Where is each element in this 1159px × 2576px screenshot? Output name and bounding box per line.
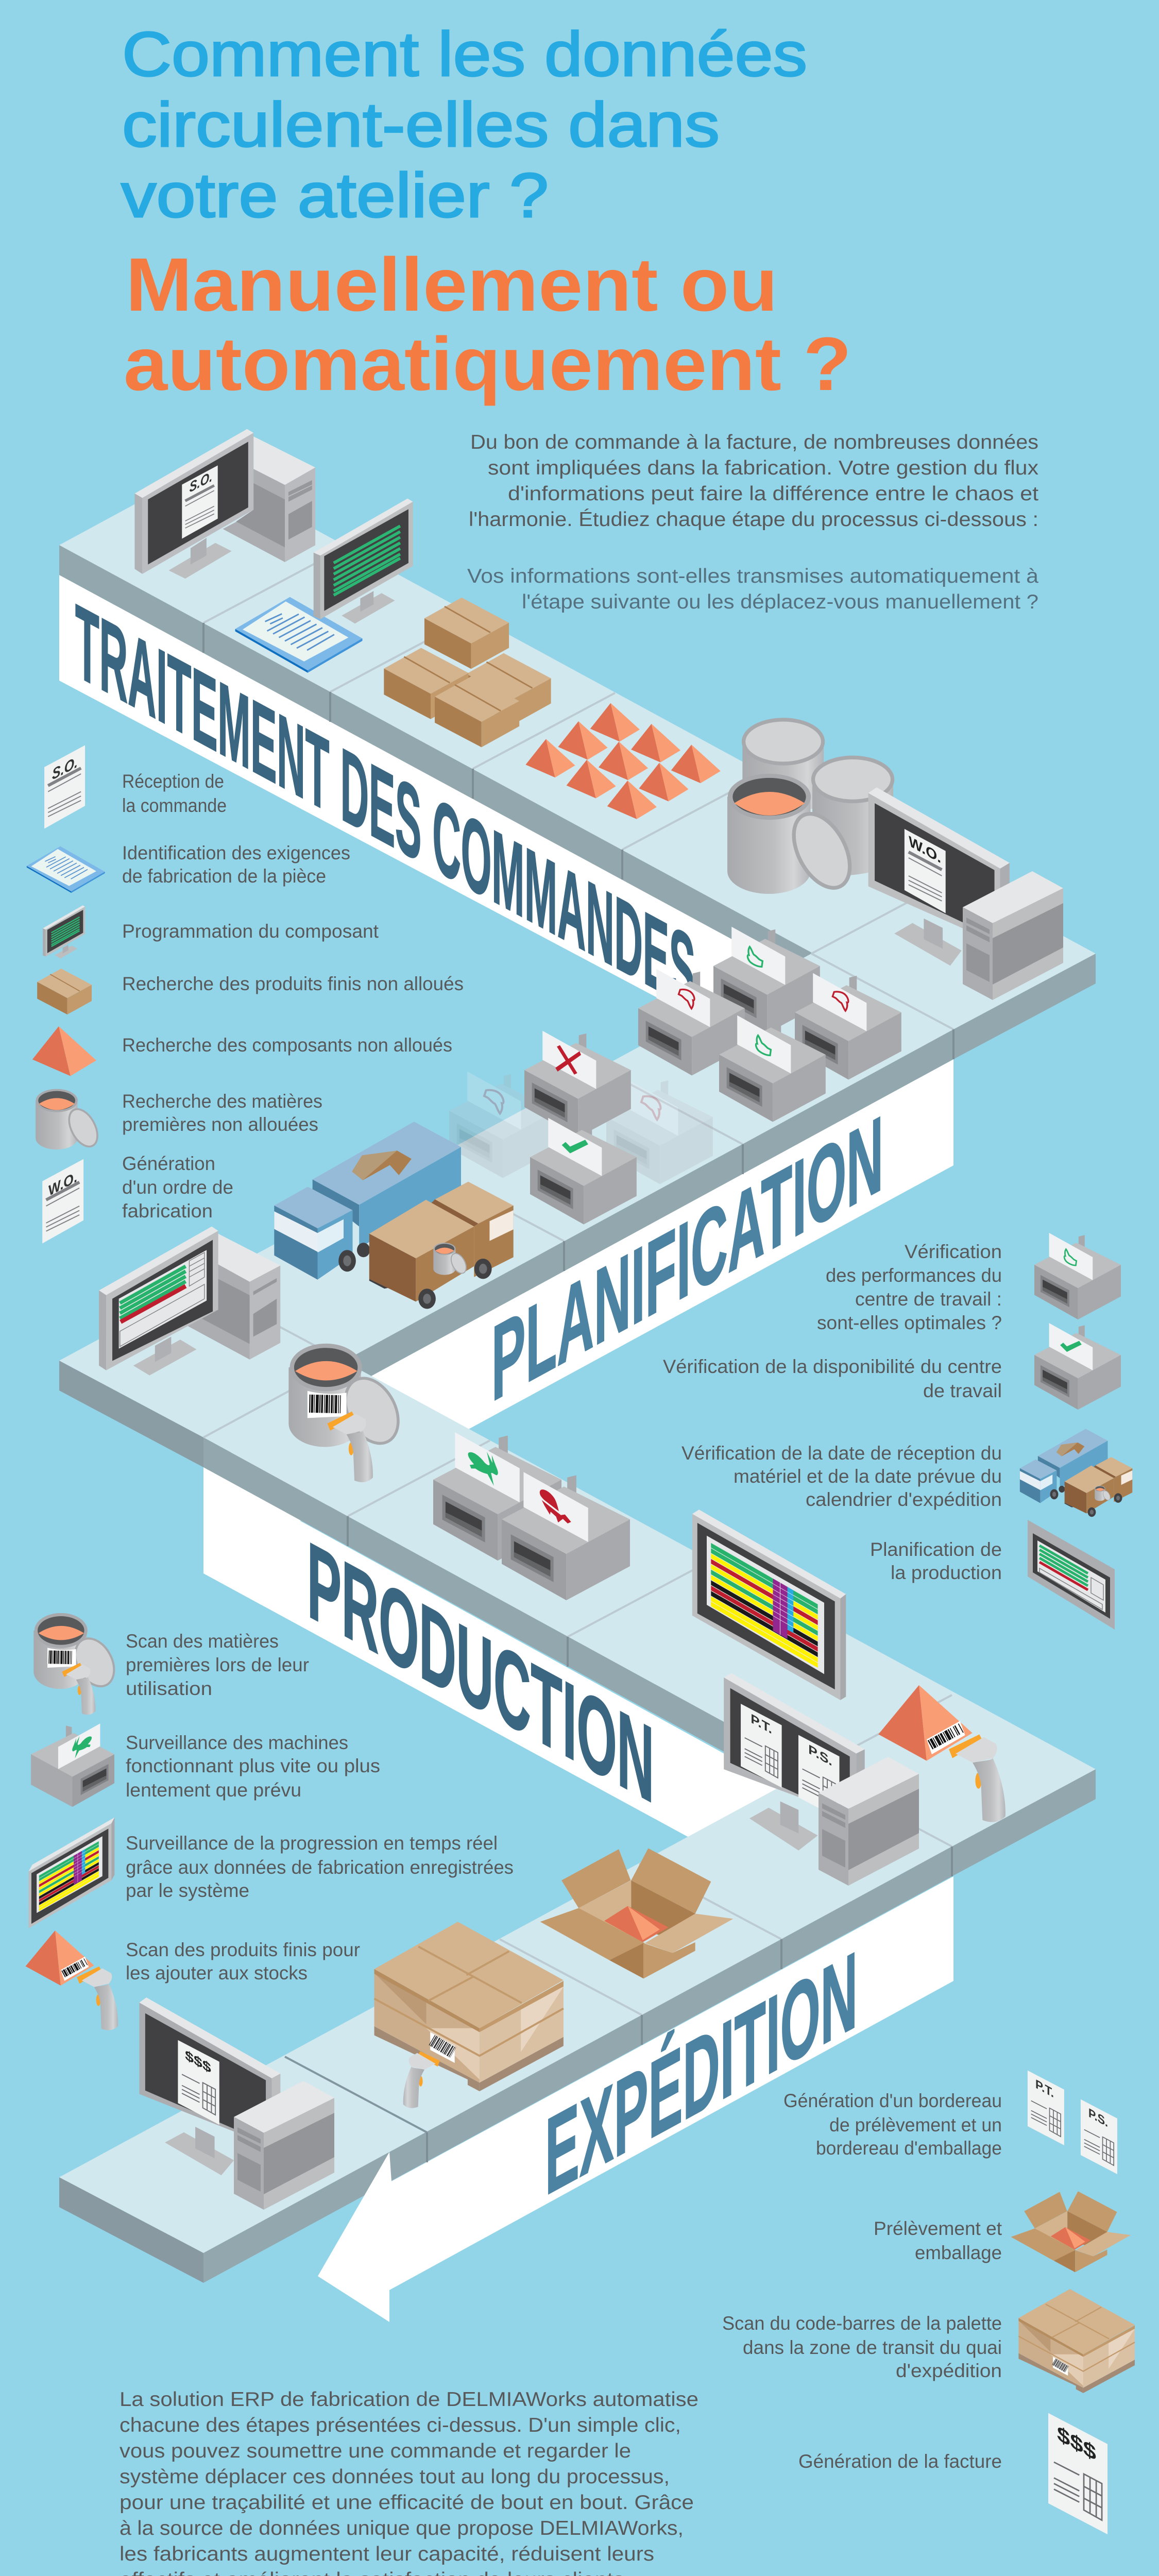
icon: pick and packing slips computer: P.T. — [751, 1711, 772, 1737]
icon: wrapped pallet — [374, 1922, 564, 2091]
band: planning front — [203, 1029, 953, 1467]
legend text: dates — [681, 1443, 1002, 1510]
legend icon: pick ticket — [1028, 2071, 1064, 2145]
legend icon: invoice: $$$ — [1057, 2421, 1096, 2466]
title: question: circulent-elles dans — [122, 90, 720, 160]
icon: rejected work center — [524, 1031, 631, 1138]
band: shipping left — [59, 2177, 203, 2283]
legend text: realtime progress: par le système — [126, 1880, 249, 1901]
legend icon: schedule — [28, 1770, 114, 1976]
icon: thumbs down work center right — [795, 973, 901, 1080]
icon: approved work center — [530, 1118, 637, 1225]
icon: pick and packing slips computer: P.S. — [808, 1741, 832, 1769]
arrow head — [318, 2152, 391, 2322]
legend text: realtime progress — [126, 1833, 514, 1901]
wall: expedition — [389, 1876, 953, 2290]
legend text: availability: de travail — [923, 1380, 1002, 1401]
legend text: dates: calendrier d'expédition — [806, 1489, 1002, 1510]
icon: raw material cans — [727, 720, 893, 897]
band: order processing front — [59, 545, 953, 1059]
platform top: production — [203, 1361, 1096, 1846]
legend text: part requirements: Identification des exigences — [122, 842, 350, 863]
legend text: slips: de prélèvement et un — [829, 2114, 1002, 2136]
text: introduction — [467, 431, 1039, 613]
platform top: order processing — [59, 468, 1096, 1029]
legend text: raw materials — [122, 1091, 322, 1135]
legend text: finished goods scan: les ajouter aux stocks — [126, 1962, 308, 1984]
icon: thumbs down work center left — [638, 969, 745, 1076]
title: question: votre atelier ? — [121, 160, 549, 230]
platform top: planning — [59, 954, 953, 1437]
icon: stacked boxes — [384, 598, 551, 747]
legend text: finished goods: Recherche des produits finis non alloués — [122, 973, 464, 994]
legend text: pallet scan: d'expédition — [896, 2360, 1002, 2381]
legend text: raw material scan: Scan des matières — [126, 1631, 279, 1652]
icon: work order tower — [963, 871, 1063, 1000]
legend icon: pick ticket: P.T. — [1035, 2077, 1054, 2100]
legend icon: thumbs up machine — [1034, 1233, 1121, 1319]
legend text: order reception: la commande — [122, 795, 227, 816]
legend text: production planning: Planification de — [870, 1539, 1002, 1560]
legend text: components: Recherche des composants non alloués — [122, 1035, 452, 1056]
legend text: raw materials: Recherche des matières — [122, 1091, 322, 1112]
legend text: production planning: la production — [891, 1562, 1002, 1583]
chart: production schedule screen — [692, 1510, 846, 1700]
legend icon: scanned pyramid — [26, 1930, 118, 2030]
text: solution paragraph: chacune des étapes présentées ci-dessus. D'un simple clic, — [120, 2414, 681, 2436]
text: solution paragraph: La solution ERP de fabrication de DELMIAWorks automatise — [120, 2388, 698, 2411]
text: introduction: l'harmonie. Étudiez chaque étape du processus ci-dessous : — [469, 509, 1038, 531]
legend text: dates: matériel et de la date prévue du — [734, 1466, 1002, 1487]
legend icon: packing slip: P.S. — [1088, 2106, 1108, 2130]
legend icon: rabbit machine — [31, 1723, 114, 1807]
legend text: work center performance: Vérification — [905, 1241, 1002, 1262]
icon: work order computer — [868, 787, 1010, 965]
legend text: machine monitoring: Surveillance des machines — [126, 1732, 348, 1753]
panel: isometric platform path: PRODUCTION — [307, 1518, 654, 1827]
legend icon: work order: W.O. — [48, 1168, 77, 1200]
icon: sales order computer: S.O. — [190, 468, 212, 496]
icon: work order computer: W.O. — [909, 833, 941, 867]
icon: invoice tower — [234, 2081, 334, 2210]
legend text: slips — [783, 2090, 1002, 2159]
legend icon: can — [36, 1089, 103, 1151]
icon: invoice computer — [139, 1997, 280, 2175]
legend text: pallet scan: Scan du code-barres de la palette — [722, 2313, 1002, 2334]
legend text: picking: Prélèvement et — [874, 2218, 1002, 2239]
icon: slow machine — [502, 1472, 630, 1600]
wall: traitement des commandes — [59, 575, 811, 1021]
legend text: pallet scan: dans la zone de transit du quai — [743, 2337, 1002, 2358]
text: introduction: l'étape suivante ou les déplacez-vous manuellement ? — [522, 591, 1038, 613]
text: solution paragraph: pour une traçabilité et une efficacité de bout en bout. Grâce — [120, 2492, 694, 2514]
legend text: work center performance — [817, 1241, 1002, 1333]
band: production right corner — [952, 1769, 1096, 1876]
icon: pallet scanner — [403, 2051, 440, 2108]
icon: scanned can — [288, 1344, 409, 1482]
legend text: work order generation: d'un ordre de — [122, 1177, 233, 1198]
wall: planification — [203, 1059, 953, 1573]
legend icon: pyramid — [32, 1026, 96, 1076]
legend text: picking: emballage — [915, 2242, 1002, 2263]
legend text: raw material scan: premières lors de leur — [126, 1654, 309, 1675]
legend text: machine monitoring: lentement que prévu — [126, 1780, 301, 1801]
band: left corner — [59, 1361, 203, 1467]
legend icon: clipboard — [27, 846, 105, 893]
band: production front — [203, 1437, 952, 1876]
legend icon: sales order — [44, 745, 85, 828]
legend icon: work order — [42, 1159, 83, 1243]
legend text: machine monitoring — [126, 1732, 380, 1801]
legend text: part requirements: de fabrication de la pièce — [122, 866, 326, 887]
icon: pick and packing slips computer — [724, 1673, 865, 1851]
icon: sales order computer — [134, 429, 315, 579]
legend icon: pallet — [1018, 2289, 1135, 2393]
band: right corner — [953, 954, 1096, 1059]
icon: planning computer — [99, 1227, 280, 1376]
legend text: finished goods scan — [126, 1939, 360, 1984]
legend icon: sales order: S.O. — [52, 753, 78, 784]
legend text: work center performance: des performances du — [826, 1265, 1002, 1286]
legend text: availability: Vérification de la disponibilité du centre — [663, 1356, 1002, 1377]
text: introduction: Vos informations sont-elles transmises automatiquement à — [467, 565, 1038, 587]
legend text: work center performance: sont-elles optimales ? — [817, 1312, 1002, 1333]
legend text: raw material scan — [126, 1631, 309, 1699]
legend text: order reception — [122, 771, 227, 816]
legend text: work order generation: Génération — [122, 1153, 215, 1174]
title: question: Comment les données — [122, 19, 807, 89]
legend text: work center performance: centre de travail : — [855, 1289, 1002, 1310]
icon: open box — [540, 1849, 733, 1978]
text: introduction: sont impliquées dans la fabrication. Votre gestion du flux — [488, 457, 1039, 479]
text: introduction: Du bon de commande à la facture, de nombreuses données — [470, 431, 1038, 453]
legend icon: invoice — [1048, 2413, 1107, 2534]
legend text: slips: bordereau d'emballage — [816, 2138, 1002, 2159]
icon: invoice computer: $$$ — [185, 2047, 211, 2076]
legend text: work order generation — [122, 1153, 233, 1222]
icon: trucks — [274, 1122, 514, 1309]
icon: clipboard — [235, 597, 362, 673]
legend text: availability — [663, 1356, 1002, 1401]
legend icon: scanned can — [33, 1613, 122, 1715]
legend text: production planning — [870, 1539, 1002, 1583]
legend icon: check machine — [1034, 1323, 1121, 1410]
legend icon: trucks — [1020, 1429, 1132, 1517]
text: solution paragraph — [120, 2388, 698, 2576]
legend icon: packing slip — [1081, 2099, 1117, 2174]
icon: tower — [819, 1757, 919, 1886]
legend text: raw material scan: utilisation — [126, 1678, 212, 1699]
legend text: machine monitoring: fonctionnant plus vite ou plus — [126, 1755, 380, 1776]
text: solution paragraph: système déplacer ces données tout au long du processus, — [120, 2466, 670, 2488]
legend text: picking — [874, 2218, 1002, 2263]
legend icon: box — [37, 969, 92, 1014]
legend text: realtime progress: Surveillance de la progression en temps réel — [126, 1833, 498, 1854]
legend text: slips: Génération d'un bordereau — [783, 2090, 1002, 2111]
legend icon: planning screen — [1028, 1520, 1115, 1630]
text: solution paragraph: les fabricants augmentent leur capacité, réduisent leurs — [120, 2543, 654, 2565]
icon: thumbs up work center back — [713, 927, 820, 1033]
legend icon: monitor — [43, 905, 85, 958]
legend text: realtime progress: grâce aux données de fabrication enregistrées — [126, 1857, 514, 1878]
title: manual or automatic — [124, 243, 851, 406]
icon: pyramids — [525, 703, 721, 819]
legend icon: open box — [1011, 2191, 1131, 2272]
legend text: work order generation: fabrication — [122, 1200, 213, 1222]
text: introduction: d'informations peut faire la différence entre le chaos et — [508, 483, 1038, 505]
icon: ghost work centers — [449, 1072, 713, 1184]
text: solution paragraph: à la source de données unique que propose DELMIAWorks, — [120, 2517, 684, 2539]
icon: scanned pyramid — [878, 1685, 1005, 1822]
legend text: order reception: Réception de — [122, 771, 224, 792]
text: solution paragraph: vous pouvez soumettre une commande et regarder le — [120, 2440, 631, 2462]
icon: fast machine — [433, 1432, 561, 1561]
legend text: dates: Vérification de la date de réception du — [681, 1443, 1002, 1464]
wall: production — [203, 1468, 810, 1837]
legend text: part requirements — [122, 842, 350, 887]
title: manual or automatic: Manuellement ou — [126, 243, 778, 327]
icon: thumbs up work center front — [719, 1015, 826, 1122]
title: manual or automatic: automatiquement ? — [124, 322, 851, 406]
legend text: finished goods scan: Scan des produits finis pour — [126, 1939, 360, 1960]
legend text: raw materials: premières non allouées — [122, 1114, 318, 1135]
band: shipping front — [203, 1846, 952, 2283]
legend text: pallet scan — [722, 2313, 1002, 2381]
legend text: component programming: Programmation du composant — [122, 921, 379, 942]
title: question — [121, 19, 807, 230]
panel: isometric platform path — [59, 468, 1096, 2322]
platform top: shipping — [59, 1771, 952, 2253]
legend text: invoice: Génération de la facture — [798, 2451, 1002, 2472]
icon: programming monitor — [314, 499, 413, 623]
